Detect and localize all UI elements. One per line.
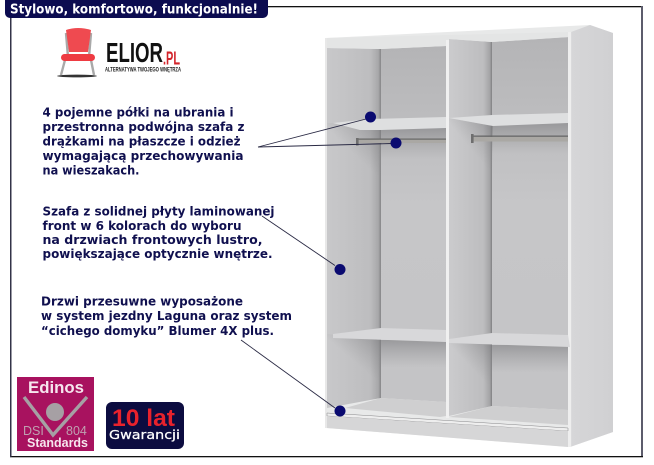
text block: sliding doors: w system jezdny Laguna oraz system <box>41 308 292 323</box>
left hanging rail <box>356 138 446 146</box>
upper left shelf <box>333 117 446 130</box>
lower left shelf <box>333 328 446 342</box>
left compartment floor <box>345 398 446 417</box>
callout dots <box>334 112 402 416</box>
text block: sliding doors: Drzwi przesuwne wyposażone <box>41 294 243 309</box>
under lower shelf shadow left wall <box>327 334 381 380</box>
text block: material: powiększające optycznie wnętrze. <box>42 246 272 261</box>
right compartment floor <box>449 406 568 425</box>
under shelf shadow right wall <box>449 118 493 170</box>
lower right shelf <box>449 333 570 347</box>
under shelf shadow left wall <box>327 123 381 175</box>
text block: material: Szafa z solidnej płyty laminowanej <box>42 204 274 219</box>
plinth <box>327 416 568 447</box>
text block: material: na drzwiach frontowych lustro, <box>42 232 262 247</box>
text block: material: front w 6 kolorach do wyboru <box>42 218 242 233</box>
under lower shelf shadow right wall <box>449 340 492 385</box>
warranty years: 10 lat <box>112 405 175 432</box>
badge circle <box>46 403 64 421</box>
wardrobe illustration <box>325 25 613 447</box>
right hanging rail <box>471 134 568 143</box>
text block: shelves: 4 pojemne półki na ubrania i <box>42 105 234 120</box>
left compartment wall <box>327 48 381 408</box>
logo: Elior <box>57 28 181 77</box>
under shelf shadow left back <box>381 127 446 159</box>
badge: Edinos standards <box>17 377 94 451</box>
upper right shelf <box>449 113 568 126</box>
badge title: Edinos <box>28 378 84 397</box>
left compartment back panel <box>381 46 446 402</box>
text block: sliding doors: “cichego domyku” Blumer 4X plus. <box>41 323 274 338</box>
right edge <box>568 32 571 447</box>
header banner: Stylowo, komfortowo, funkcjonalnie! <box>10 2 258 18</box>
badge: 10 years warranty <box>106 402 184 449</box>
under lower shelf shadow left back <box>381 340 446 368</box>
right compartment back panel <box>492 37 568 410</box>
top board <box>326 32 570 49</box>
logo tagline: ALTERNATYWA TWOJEGO WNĘTRZA <box>105 66 181 74</box>
badge Standards: Standards <box>27 436 88 450</box>
sliding track <box>327 413 568 431</box>
text block: shelves: przestronna podwójna szafa z <box>42 119 244 134</box>
badge V mark <box>24 397 87 435</box>
logo wordmark: ELIOR <box>106 37 163 68</box>
icon: red chair <box>57 28 97 77</box>
badge DSI: DSI <box>23 424 44 438</box>
warranty label: Gwarancji <box>109 427 180 442</box>
center divider <box>446 40 449 418</box>
left edge <box>325 38 327 428</box>
callout lines <box>241 119 392 408</box>
logo suffix: .PL <box>163 48 180 68</box>
right compartment wall <box>449 39 492 416</box>
under lower shelf shadow right back <box>492 345 568 373</box>
wardrobe side panel <box>570 25 613 447</box>
under shelf shadow right back <box>492 122 568 154</box>
badge 804: 804 <box>66 424 87 438</box>
text block: shelves: drążkami na płaszcze i odzież <box>42 134 240 149</box>
text block: shelves: wymagającą przechowywania <box>42 148 244 163</box>
text block: shelves: na wieszakach. <box>42 162 140 177</box>
